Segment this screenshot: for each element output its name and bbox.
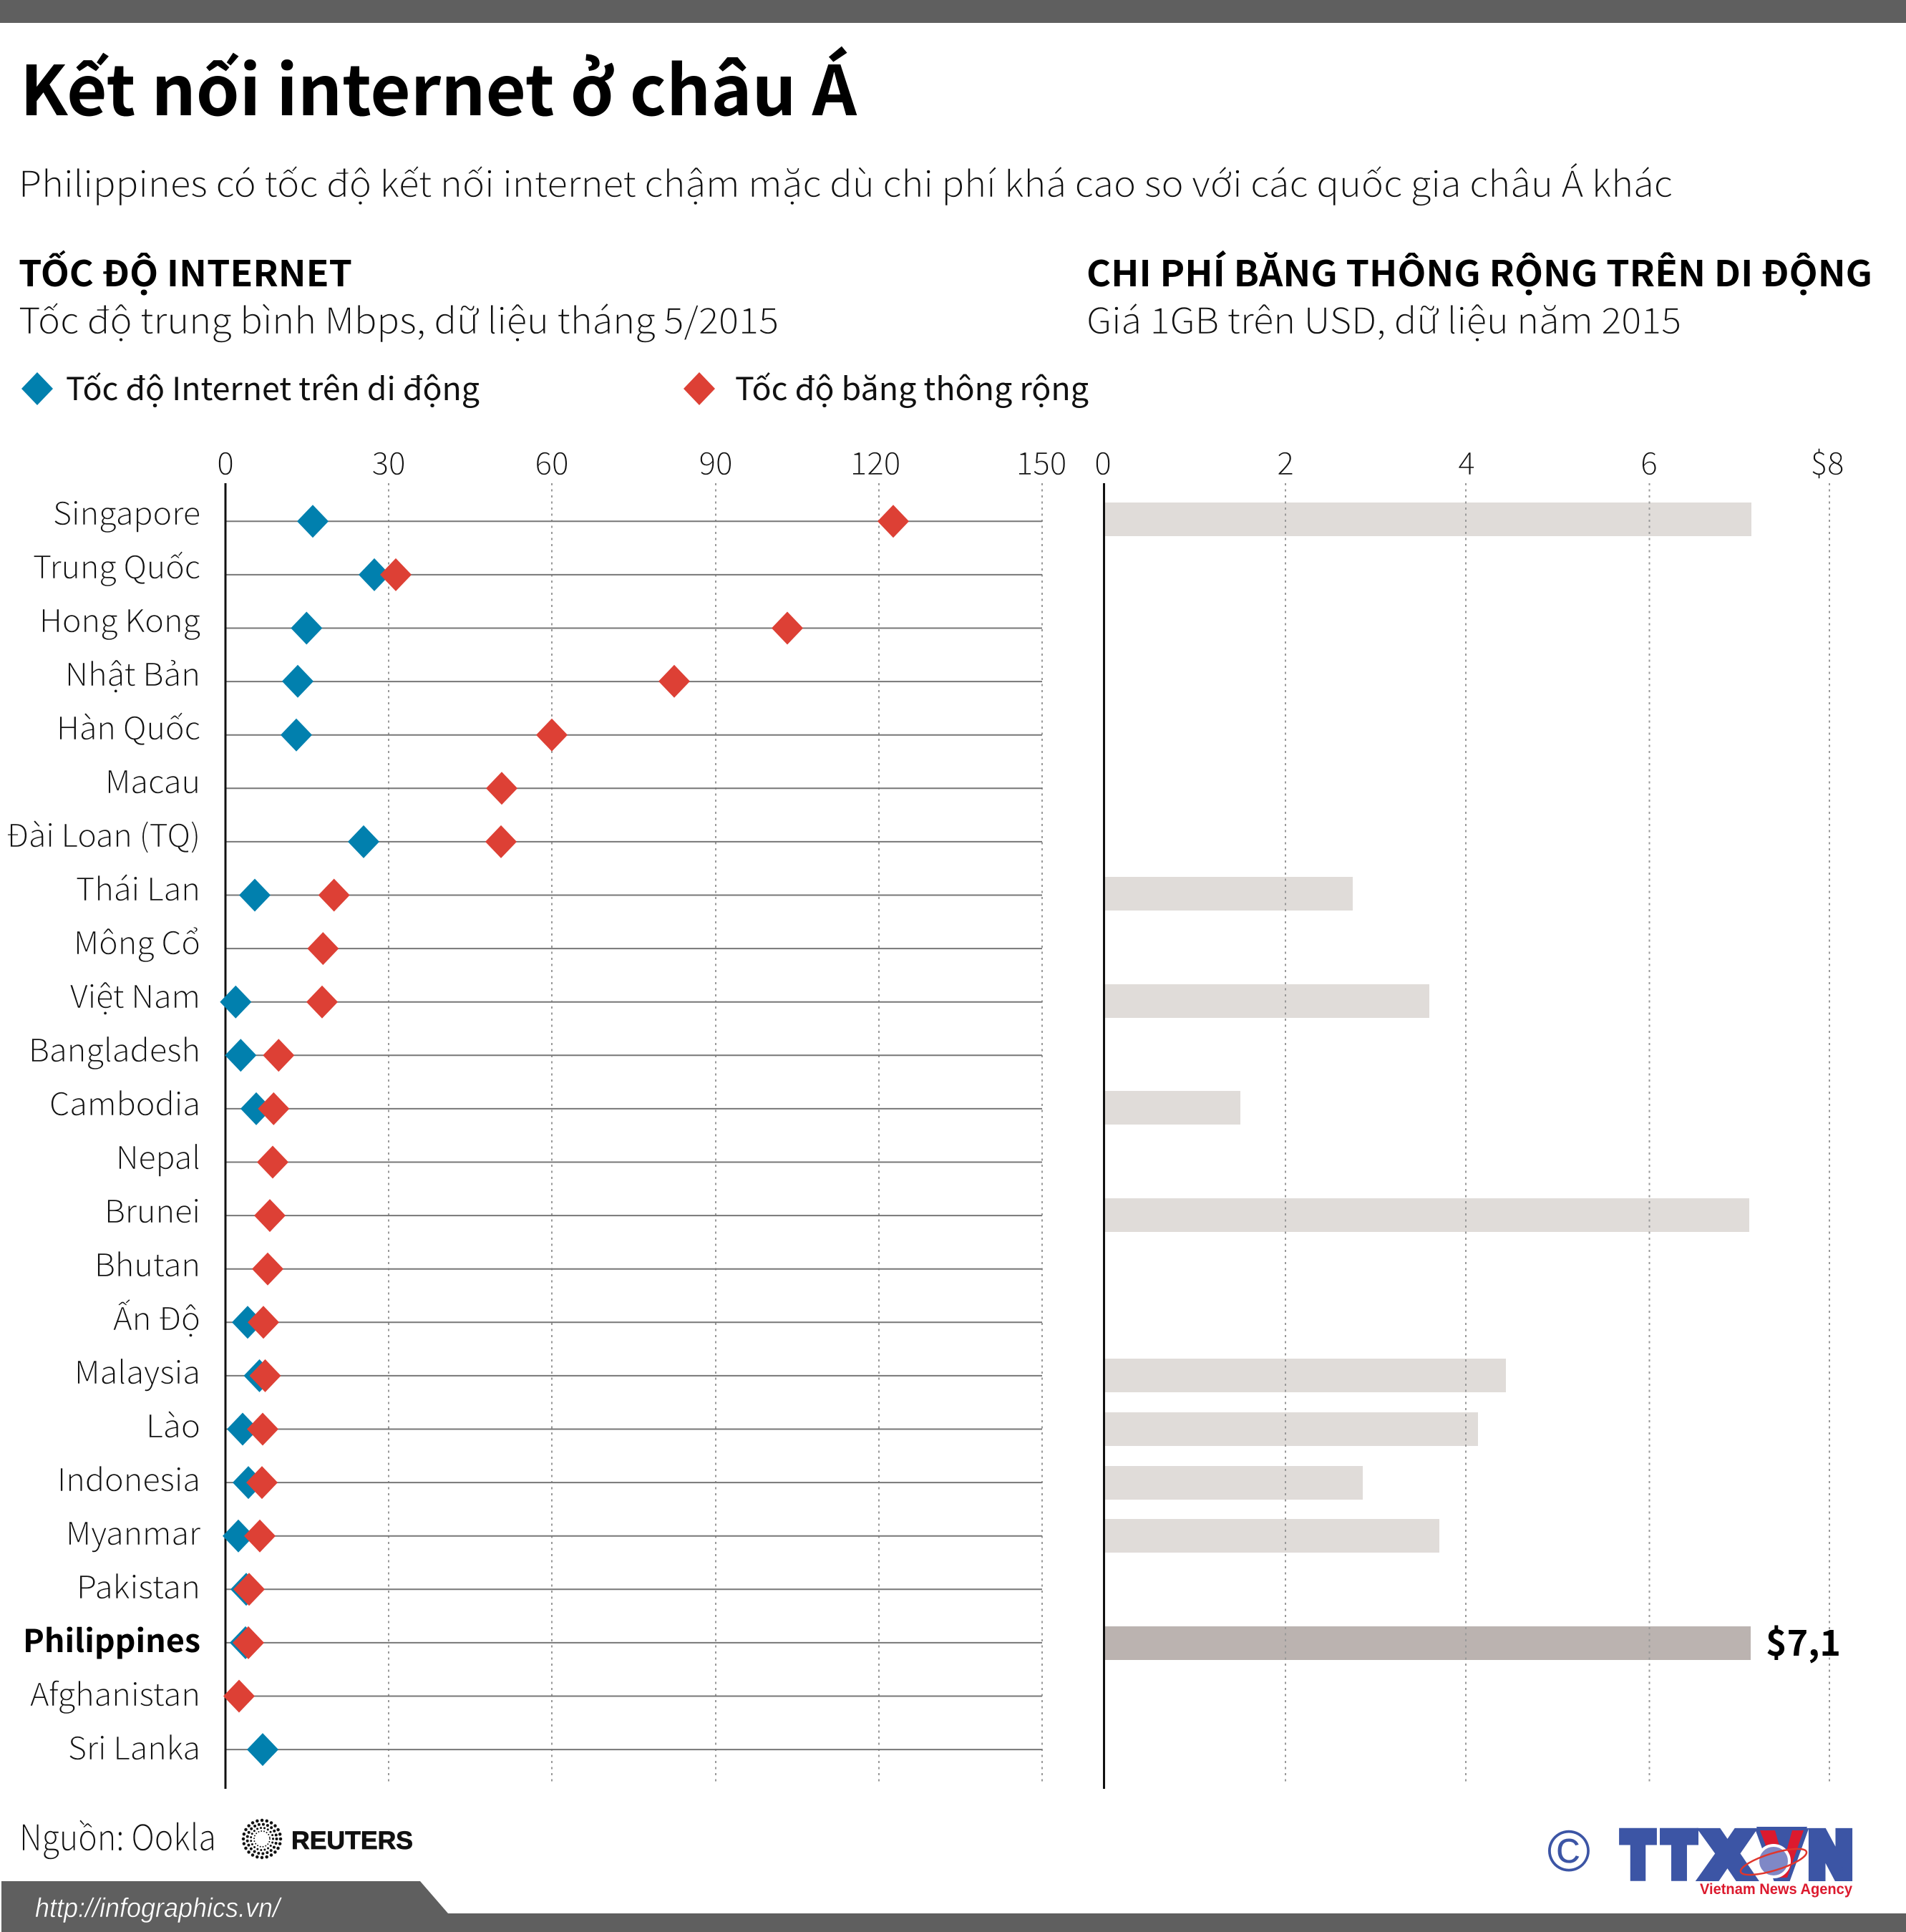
cost axis labels: 0 <box>1094 438 1112 484</box>
markers: Myanmar <box>223 1520 276 1553</box>
country labels: Singapore <box>53 488 200 534</box>
country labels: Malaysia <box>74 1347 200 1393</box>
legend <box>21 364 1089 409</box>
bar: Thái Lan <box>1104 877 1353 911</box>
markers: Pakistan <box>230 1573 265 1606</box>
speed axis labels: 30 <box>371 438 406 484</box>
country labels: Đài Loan (TQ) <box>6 810 200 856</box>
country labels: Thái Lan <box>76 864 200 910</box>
cost bar chart <box>1104 503 1751 1660</box>
markers: Việt Nam <box>220 986 338 1019</box>
bar: Singapore <box>1104 503 1751 536</box>
markers: Bangladesh <box>225 1039 294 1072</box>
country labels: Nepal <box>116 1132 200 1178</box>
heading: internet speed: TỐC ĐỘ INTERNET <box>19 246 352 297</box>
country labels: Hong Kong <box>39 596 200 641</box>
markers: Brunei <box>254 1199 286 1232</box>
markers: Sri Lanka <box>247 1733 278 1766</box>
country labels: Nhật Bản <box>65 649 200 695</box>
country labels: Brunei <box>104 1186 200 1232</box>
heading: mobile broadband cost: Giá 1GB trên USD, dữ liệu năm 2015 <box>1086 293 1681 344</box>
source text: Nguồn: Ookla <box>19 1810 216 1861</box>
subtitle: Philippines có tốc độ kết nối internet chậm mặc dù chi phí khá cao so với các quốc gia châu Á khác <box>19 156 1673 208</box>
logo: TTXVN: N <box>1809 1820 1852 1890</box>
speed axis labels: 90 <box>699 438 733 484</box>
logo: TTXVN: Vietnam News Agency <box>1700 1881 1852 1898</box>
bar: Philippines <box>1104 1626 1751 1660</box>
speed axis labels: 60 <box>535 438 569 484</box>
value: Philippines cost: $7,1 <box>1766 1615 1841 1666</box>
markers: Philippines <box>230 1626 264 1659</box>
country labels: Sri Lanka <box>68 1723 200 1769</box>
country labels: Afghanistan <box>30 1669 200 1715</box>
icon: Reuters logo: REUTERS <box>291 1827 413 1855</box>
cost axis labels: 4 <box>1458 438 1475 484</box>
markers: Mông Cổ <box>307 932 339 965</box>
heading: internet speed <box>19 246 779 344</box>
markers: Malaysia <box>243 1359 281 1392</box>
legend: mobile speed: Tốc độ Internet trên di động <box>66 364 480 409</box>
bar: Myanmar <box>1104 1519 1439 1553</box>
country labels <box>6 488 200 1769</box>
speed dot plot <box>220 505 909 1766</box>
markers: Trung Quốc <box>359 558 412 591</box>
bar: Brunei <box>1104 1198 1749 1232</box>
markers: Macau <box>486 772 517 805</box>
speed axis labels <box>217 438 1066 484</box>
heading: internet speed: Tốc độ trung bình Mbps, dữ liệu tháng 5/2015 <box>19 293 779 344</box>
country labels: Philippines <box>23 1616 200 1661</box>
country labels: Bangladesh <box>29 1025 200 1071</box>
speed axis labels: 120 <box>850 438 900 484</box>
logo: TTXVN: T <box>1663 1820 1695 1890</box>
cost axis labels: 2 <box>1277 438 1294 484</box>
country labels: Indonesia <box>57 1455 200 1500</box>
country labels: Myanmar <box>66 1508 200 1554</box>
legend: broadband speed: Tốc độ băng thông rộng <box>735 364 1089 409</box>
markers: Singapore <box>297 505 909 538</box>
markers: Nhật Bản <box>282 665 690 698</box>
bar: Việt Nam <box>1104 984 1429 1018</box>
speed axis line <box>225 483 226 1789</box>
top bar <box>0 0 1906 23</box>
heading: mobile broadband cost <box>1086 246 1872 344</box>
logo: TTXVN: T <box>1623 1820 1653 1890</box>
country labels: Macau <box>105 757 200 802</box>
markers: Indonesia <box>233 1466 278 1499</box>
markers: Afghanistan <box>223 1679 255 1712</box>
cost axis labels: 6 <box>1640 438 1658 484</box>
country labels: Việt Nam <box>70 971 200 1017</box>
cost axis labels <box>1094 438 1844 484</box>
markers: Thái Lan <box>239 879 350 912</box>
logo: TTXVN <box>1623 1820 1852 1898</box>
logo: TTXVN: X <box>1705 1820 1750 1890</box>
speed axis labels: 0 <box>217 438 234 484</box>
title: Kết nối internet ở châu Á <box>20 36 857 135</box>
bar: Lào <box>1104 1412 1478 1446</box>
bottom bar <box>1 1881 1906 1932</box>
website url: http://infographics.vn/ <box>35 1893 282 1923</box>
markers: Nepal <box>257 1145 288 1178</box>
markers: Hong Kong <box>291 611 803 644</box>
cost axis line <box>1103 483 1105 1789</box>
cost axis labels: $8 <box>1810 438 1844 484</box>
country labels: Hàn Quốc <box>57 703 200 749</box>
country labels: Pakistan <box>77 1562 200 1608</box>
country labels: Lào <box>146 1401 200 1447</box>
icon: Reuters logo <box>243 1820 413 1858</box>
country labels: Trung Quốc <box>33 542 200 588</box>
markers: Bhutan <box>252 1253 283 1286</box>
bar: Malaysia <box>1104 1359 1506 1392</box>
speed axis labels: 150 <box>1016 438 1066 484</box>
country labels: Bhutan <box>94 1240 200 1286</box>
country labels: Mông Cổ <box>74 918 200 963</box>
logo: TTXVN: V <box>1761 1820 1802 1890</box>
country labels: Cambodia <box>49 1079 200 1125</box>
bar: Cambodia <box>1104 1091 1240 1125</box>
markers: Cambodia <box>240 1092 289 1125</box>
bar: Indonesia <box>1104 1466 1363 1500</box>
heading: mobile broadband cost: CHI PHÍ BĂNG THÔNG RỘNG TRÊN DI ĐỘNG <box>1086 246 1872 297</box>
markers: Đài Loan <box>348 825 517 858</box>
country labels: Ấn Độ <box>113 1293 200 1339</box>
icon: copyright: © <box>1547 1819 1590 1884</box>
markers: Hàn Quốc <box>281 719 568 752</box>
markers: Lào <box>227 1413 278 1446</box>
markers: Ấn Độ <box>232 1306 279 1339</box>
